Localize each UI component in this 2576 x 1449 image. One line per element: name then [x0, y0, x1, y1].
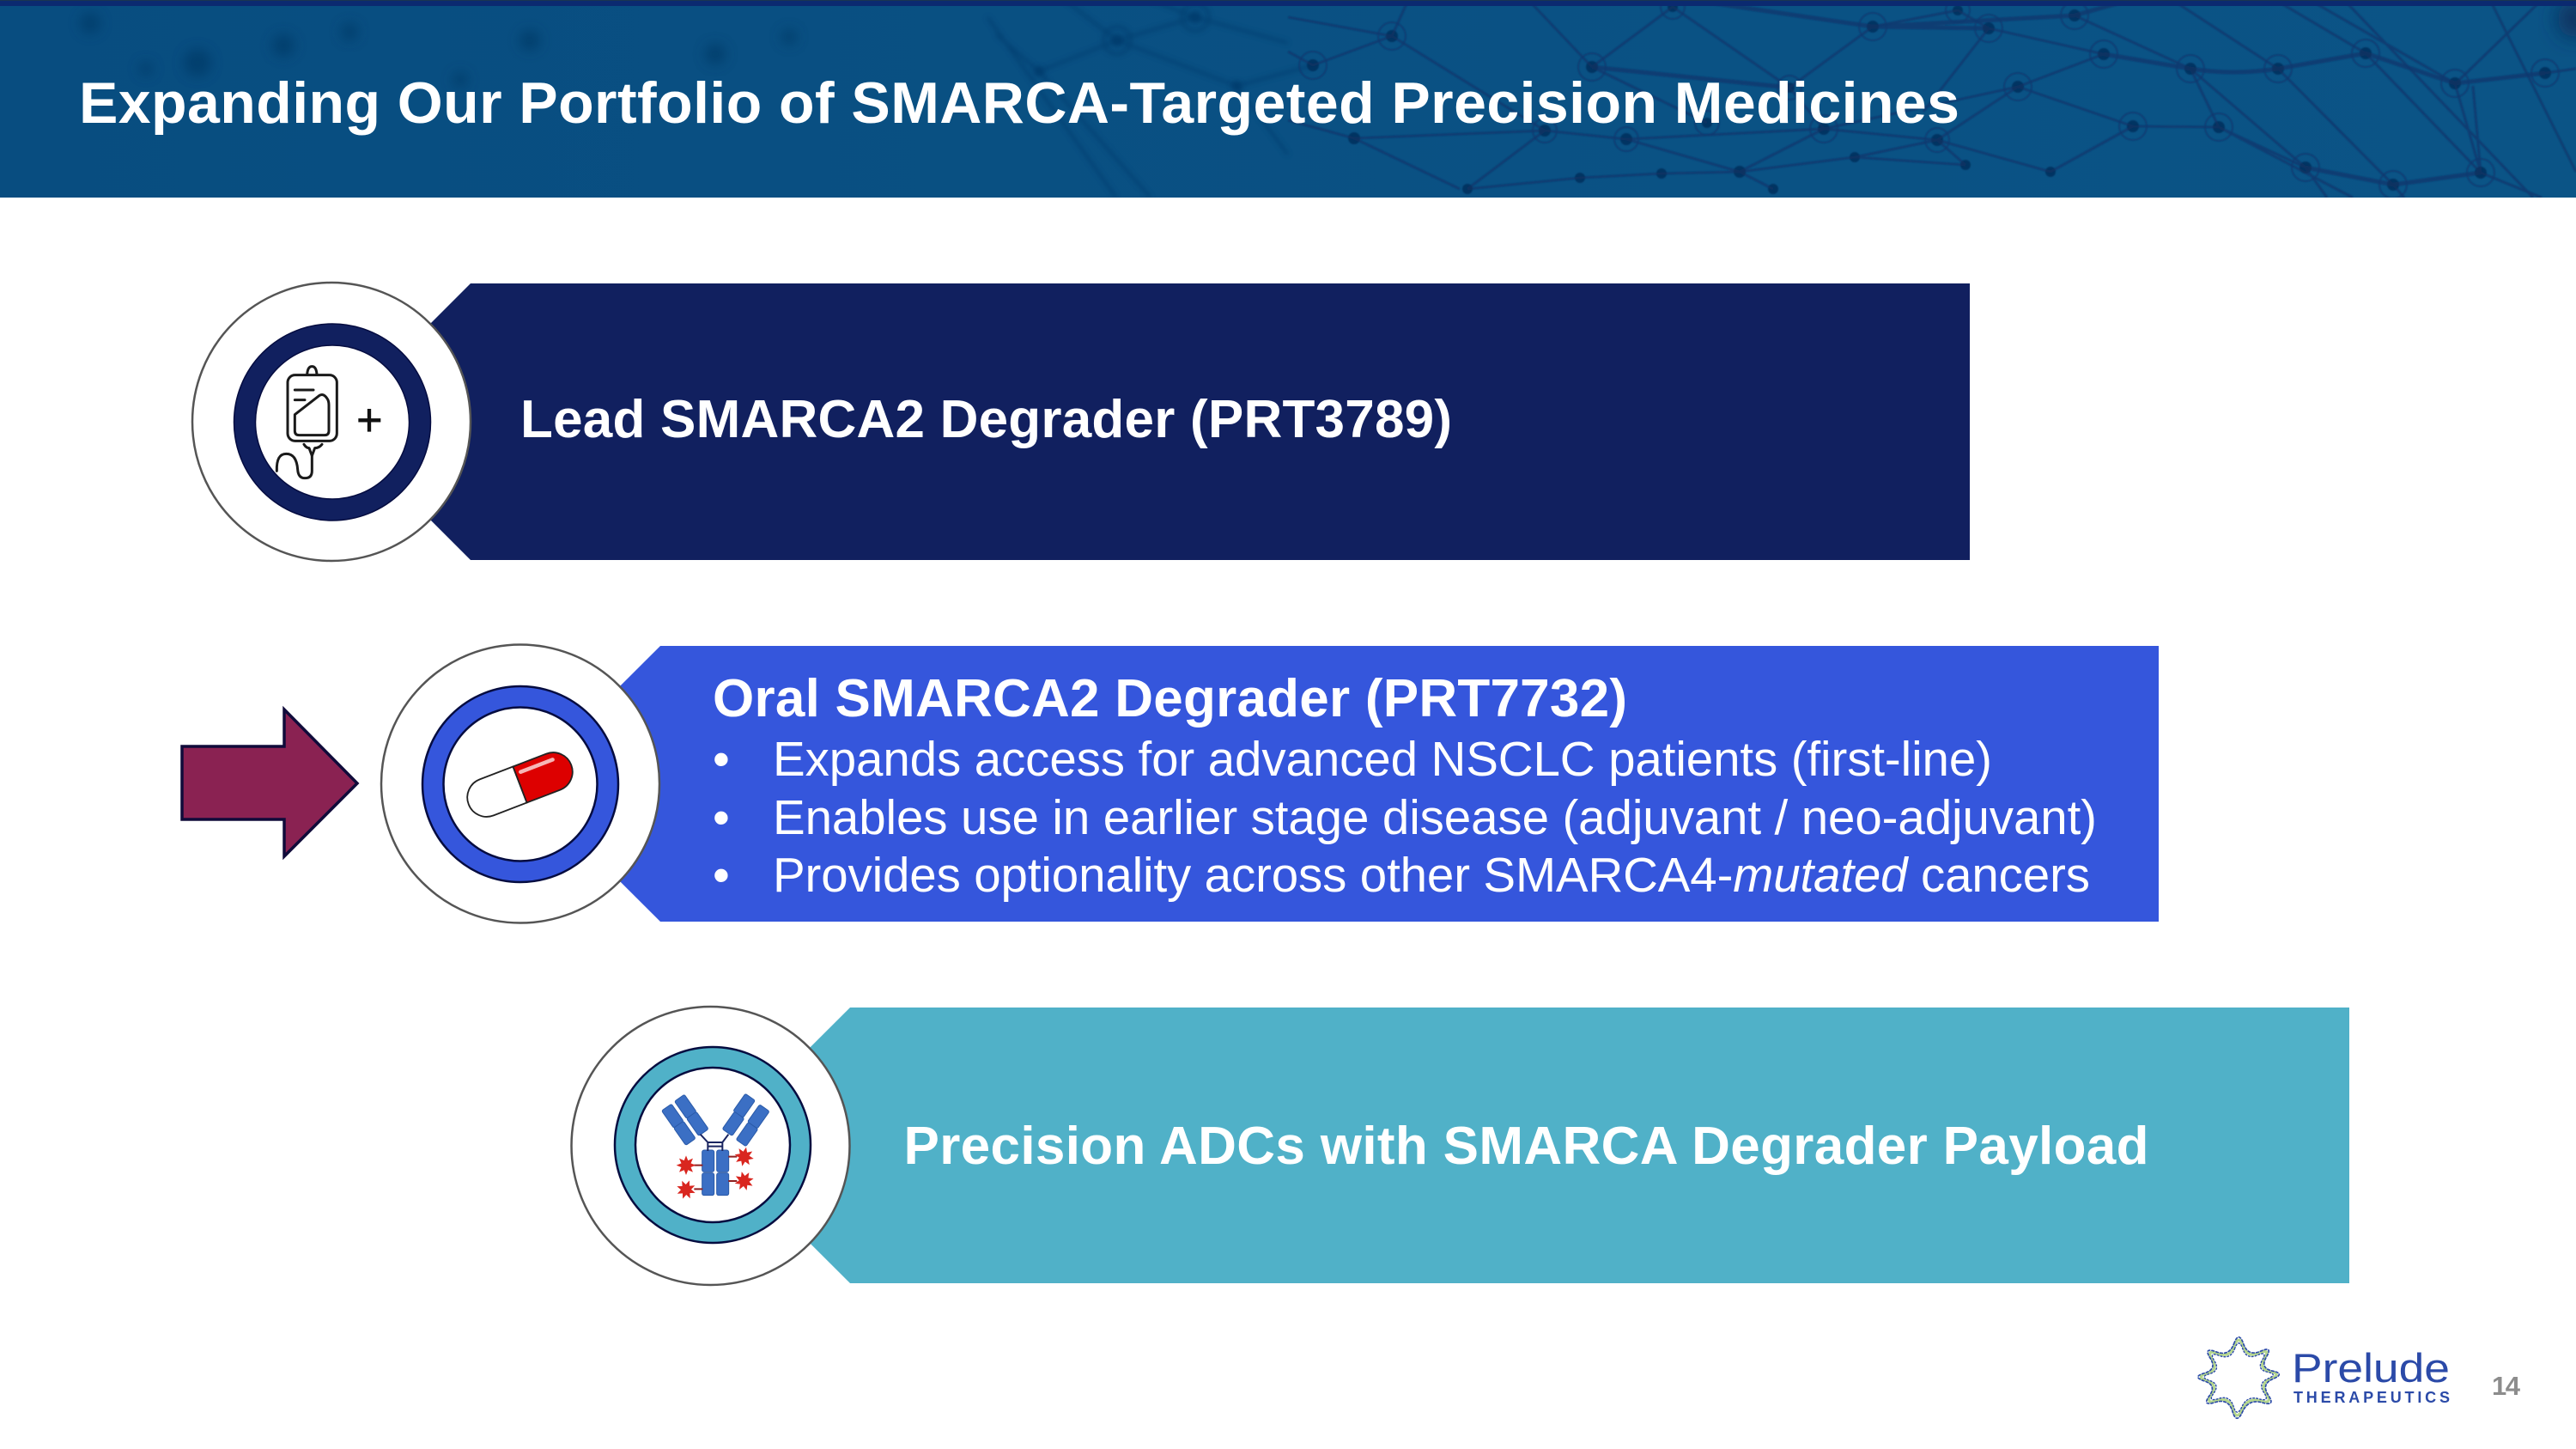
panel 3 background [712, 1008, 2349, 1283]
header banner [0, 0, 2576, 198]
panel 2 bullet list: Provides optionality across other SMARCA4-mutated cancers [773, 848, 2090, 902]
panel 2 bullet list [713, 732, 2097, 902]
logo tagline: THERAPEUTICS [2293, 1389, 2450, 1406]
logo wordmark: Prelude [2292, 1345, 2450, 1391]
panel 2 bullet list: • [713, 848, 730, 902]
panel 2 bullet list: Enables use in earlier stage disease (adjuvant / neo-adjuvant) [773, 790, 2097, 844]
logo mark [2198, 1337, 2279, 1418]
panel 2 bullet list: • [713, 732, 730, 786]
panel: oral SMARCA2 degrader [381, 644, 2159, 922]
panel 3 heading: Precision ADCs with SMARCA Degrader Payload [903, 1117, 2148, 1176]
panel 2 background [522, 646, 2159, 922]
page number: 14 [2492, 1371, 2521, 1401]
arrow: highlights oral degrader [182, 709, 357, 856]
icon: antibody drug conjugate medallion [572, 1007, 850, 1285]
panel 2 bullet list: • [713, 790, 730, 844]
panel 2 heading: Oral SMARCA2 Degrader (PRT7732) [713, 669, 1627, 728]
panel 2 bullet list: Expands access for advanced NSCLC patients (first-line) [773, 732, 1992, 786]
panel: lead SMARCA2 degrader [192, 283, 1970, 561]
icon: capsule medallion [381, 644, 659, 922]
panel 1 heading: Lead SMARCA2 Degrader (PRT3789) [520, 390, 1452, 449]
icon: IV bag medallion [192, 283, 471, 561]
panel: precision ADCs [572, 1007, 2349, 1285]
title: Expanding Our Portfolio of SMARCA-Targeted Precision Medicines [79, 70, 1959, 136]
logo: Prelude Therapeutics [2198, 1337, 2450, 1418]
panel 1 background [332, 283, 1970, 560]
